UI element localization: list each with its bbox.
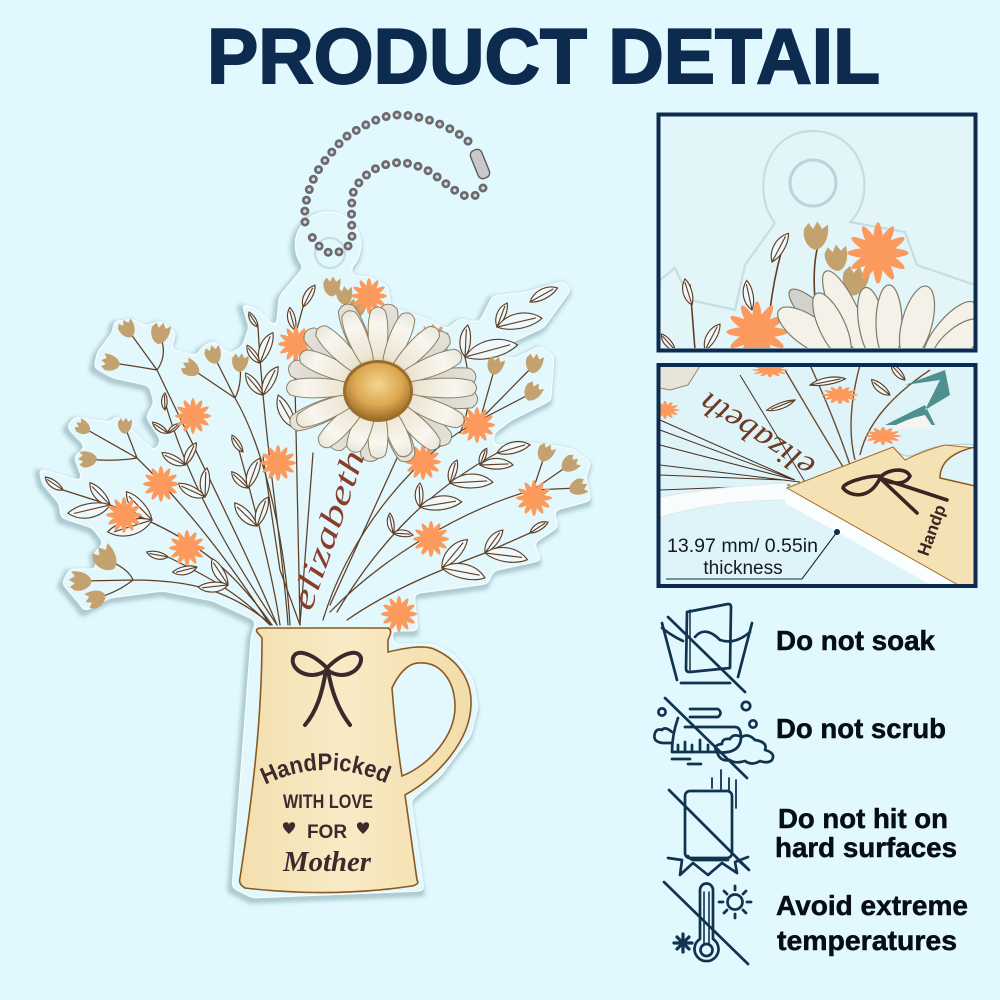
label: hard surfaces <box>775 832 957 863</box>
panel 2: engraved text: Handp <box>914 502 950 558</box>
panel 2: leaves <box>766 367 950 432</box>
label: Do not soak <box>776 625 935 656</box>
acrylic outline <box>38 213 590 900</box>
thickness callout: 13.97 mm/ 0.55in <box>667 536 818 557</box>
ball chain <box>305 115 491 253</box>
panel 1: stems and leaves <box>658 230 820 353</box>
panel 1: buds <box>804 222 871 298</box>
panel: thickness close-up <box>651 362 976 600</box>
orange flowers <box>106 278 552 632</box>
panel 2: bow <box>843 470 947 513</box>
vase: bow <box>293 653 361 725</box>
care item: do not scrub <box>654 698 946 778</box>
label: Do not scrub <box>776 713 946 744</box>
vase: engraved text: HandPicked <box>260 752 392 784</box>
panel 2: stems fan <box>660 365 930 490</box>
vase: engraved text: WITH LOVE <box>283 792 373 813</box>
panel 1: acrylic ring <box>660 131 975 310</box>
leaves <box>43 282 559 593</box>
icon: falling card <box>668 770 749 875</box>
care item: avoid extreme temperatures <box>664 882 968 964</box>
care item: do not hit on hard surfaces <box>668 770 957 875</box>
panel 2: orange flowers <box>651 363 901 445</box>
label: Avoid extreme <box>776 890 968 921</box>
label: Do not hit on <box>778 803 948 834</box>
panel 2: acrylic thickness <box>785 488 955 584</box>
stems <box>63 307 577 625</box>
product: acrylic ornament <box>32 110 594 906</box>
icon: basin with card <box>662 604 752 692</box>
panel 2: handle hole <box>940 447 975 486</box>
thickness callout <box>666 529 840 579</box>
care item: do not soak <box>662 604 935 692</box>
panel 2: mirrored name: elizabeth <box>692 385 821 486</box>
vase: engraved text: Mother <box>282 846 372 878</box>
vase <box>238 627 472 894</box>
label: temperatures <box>777 925 957 956</box>
panel 1: daisy petals <box>777 270 974 348</box>
thickness callout: thickness <box>703 558 783 579</box>
panel 1: orange flowers <box>726 222 909 363</box>
panel 2: wood vase <box>787 445 975 586</box>
icon: thermometer with sun and snowflake <box>664 882 751 964</box>
daisy <box>286 301 479 465</box>
vase: engraved text <box>260 752 392 878</box>
panel 2: white acrylic edge <box>660 483 787 517</box>
panel 2: acrylic tab <box>894 444 974 460</box>
panel: close-up of ornament top <box>656 112 978 352</box>
panel 2: daisy edge <box>660 366 700 390</box>
name: elizabeth: elizabeth <box>285 446 373 615</box>
icon: scrub brush with foam <box>654 698 773 778</box>
vase: engraved text: FOR <box>307 822 347 843</box>
title: PRODUCT DETAIL <box>207 12 880 100</box>
buds <box>69 276 590 611</box>
